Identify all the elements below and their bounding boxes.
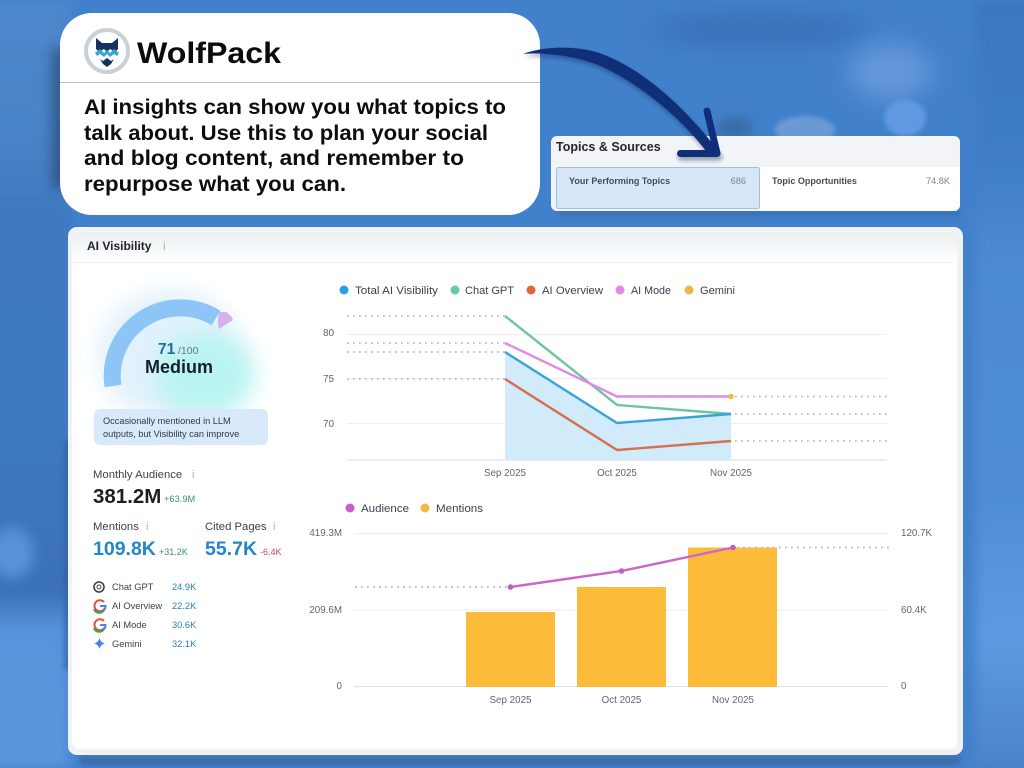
metric: Cited Pages: i [273,521,275,533]
area: total AI visibility [505,352,731,460]
metric: Monthly Audience: +63.9M [164,494,195,504]
gauge: AI visibility score: 71 [158,341,176,358]
right axis labels: 120.7K [901,528,933,539]
metric: Monthly Audience: i [192,469,194,481]
x axis labels [484,468,753,479]
tab: Topic Opportunities [772,176,951,186]
x axis labels: Sep 2025 [484,468,527,479]
callout text: repurpose what you can. [84,173,346,196]
metric: Monthly Audience: Monthly Audience [93,469,182,481]
list: mentions by AI source [94,582,197,649]
left axis labels [309,528,343,692]
tab: Your Performing Topics: 686 [731,176,746,186]
tab: Your Performing Topics [556,168,760,208]
metric: Monthly Audience [93,469,195,508]
callout: WolfPack message card [60,13,540,215]
right axis labels: 60.4K [901,605,927,616]
row: Gemini: Gemini [112,639,141,649]
tooltip: visibility description [94,409,268,445]
marker: Gemini [728,394,734,399]
x axis labels: Nov 2025 [710,468,753,479]
panel: Topics & Sources [551,136,960,211]
callout text [84,96,506,196]
row: AI Mode: AI Mode [112,620,147,630]
metric: Cited Pages: -6.4K [260,547,282,557]
metric: Mentions: 109.8K [93,538,156,560]
line chart: AI visibility by platform [323,285,887,479]
y axis labels: 70 [323,419,335,430]
line: audience [508,545,736,590]
metric: Cited Pages: Cited Pages [205,521,267,533]
combo chart: audience and mentions [309,503,933,706]
callout text: and blog content, and remember to [84,147,464,170]
series: Chat GPT [505,316,731,414]
legend: line chart [340,285,735,297]
x axis labels: Nov 2025 [712,695,755,706]
tooltip: visibility description: Occasionally mentioned in LLM [103,416,231,426]
panel: AI Visibility dashboard [68,227,963,755]
y axis labels [323,328,335,430]
arrow: from callout to Topics panel [523,48,721,158]
metric: Mentions: i [146,521,148,533]
row: Gemini [94,638,197,649]
row: AI Overview: AI Overview [112,601,162,611]
legend: line chart: Chat GPT [465,285,514,297]
gauge: AI visibility score [98,290,255,420]
tab: Your Performing Topics: Your Performing Topics [569,176,670,186]
row: Chat GPT: Chat GPT [112,582,154,592]
row: AI Mode [94,619,197,632]
tab: Topic Opportunities: 74.8K [926,176,951,186]
x axis labels: Oct 2025 [597,468,637,479]
tooltip: visibility description: outputs, but Visibility can improve [103,429,239,439]
series: AI Overview [505,379,731,450]
row: Gemini: 32.1K [172,639,197,649]
left axis labels: 419.3M [309,528,342,539]
metric: Mentions: Mentions [93,521,139,533]
left axis labels: 0 [337,681,343,692]
metric: Monthly Audience: 381.2M [93,485,161,508]
gauge: AI visibility score: /100 [178,345,199,357]
right axis labels: 0 [901,681,907,692]
panel heading: AI Visibility [87,239,152,253]
row: AI Overview: 22.2K [172,601,197,611]
legend: line chart: AI Overview [542,285,604,297]
metric: Mentions [93,521,188,560]
panel heading: Topics & Sources [556,140,661,154]
legend: combo chart: Audience [361,503,409,515]
row: Chat GPT [94,582,197,592]
metric: Cited Pages: 55.7K [205,538,257,560]
y axis labels: 80 [323,328,335,339]
tab: Topic Opportunities: Topic Opportunities [772,176,857,186]
bars: mentions [466,548,777,687]
legend: line chart: Total AI Visibility [355,285,438,297]
right axis labels [901,528,933,692]
brand name: WolfPack [137,37,282,70]
legend: line chart: AI Mode [631,285,671,297]
row: Chat GPT: 24.9K [172,582,197,592]
x axis labels: Oct 2025 [602,695,642,706]
gauge: AI visibility score: Medium [145,357,213,377]
y axis labels: 75 [323,374,335,385]
x axis labels [490,695,755,706]
metric: Cited Pages [205,521,282,560]
callout text: AI insights can show you what topics to [84,96,506,119]
row: AI Mode: 30.6K [172,620,197,630]
left axis labels: 209.6M [309,605,342,616]
legend: combo chart: Mentions [436,503,483,515]
callout text: talk about. Use this to plan your social [84,122,488,145]
series: Total AI Visibility [505,352,731,423]
legend: line chart: Gemini [700,285,735,297]
series: AI Mode [505,343,731,396]
row: AI Overview [94,600,197,613]
legend: combo chart [346,503,483,515]
x axis labels: Sep 2025 [490,695,532,706]
metric: Mentions: +31.2K [159,547,188,557]
panel heading: i [163,239,166,253]
icon: WolfPack logo [86,30,128,72]
